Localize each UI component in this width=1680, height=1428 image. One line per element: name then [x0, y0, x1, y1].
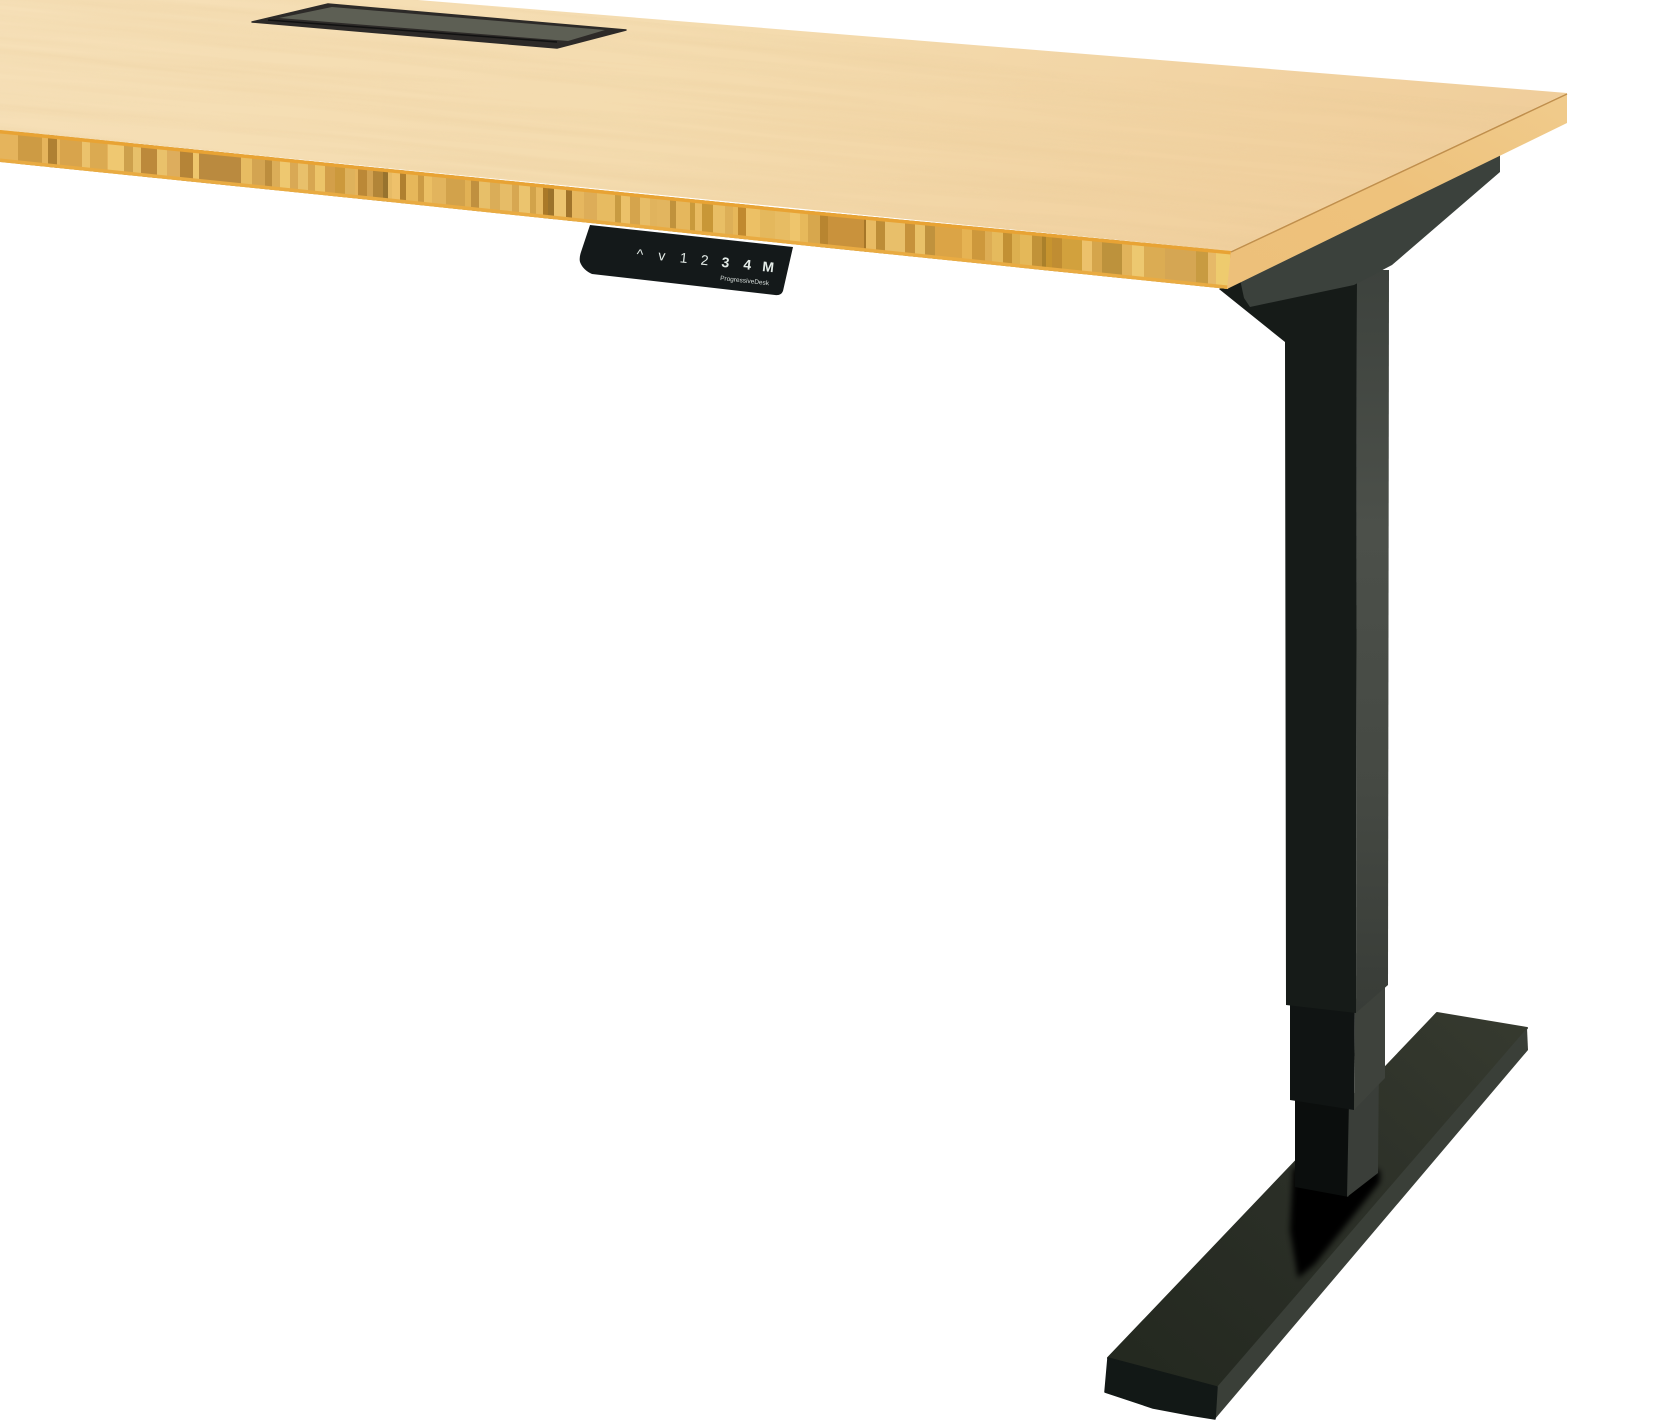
bracket: [1238, 145, 1500, 307]
foot: [1105, 1013, 1528, 1419]
shadow under leg: [1290, 1168, 1380, 1278]
cable grommet: [252, 4, 626, 48]
lower stage: [1295, 1060, 1379, 1197]
side edge highlight line: [1231, 94, 1567, 252]
grommet cover: [279, 7, 605, 41]
keypad keys: [636, 245, 775, 276]
grommet frame: [252, 4, 626, 48]
foot side face: [1215, 1028, 1528, 1419]
desktop: [0, 0, 1568, 289]
upper stage: [1219, 270, 1389, 1013]
leg column: [1219, 270, 1389, 1197]
front edge with bamboo strips: [0, 125, 1240, 295]
keypad keys: ^: [636, 246, 644, 262]
right side edge: [1227, 93, 1567, 289]
keypad keys: 2: [700, 252, 710, 268]
controller keypad: [580, 225, 793, 295]
grommet slot: [268, 20, 557, 42]
foot end cap: [1105, 1358, 1217, 1419]
keypad keys: 1: [679, 249, 689, 266]
foot top surface: [1108, 1013, 1527, 1387]
keypad keys: v: [658, 247, 666, 264]
keypad keys: 4: [743, 256, 752, 273]
keypad keys: 3: [721, 254, 730, 271]
keypad body: [580, 225, 793, 295]
keypad keys: M: [762, 258, 775, 275]
middle stage: [1290, 970, 1385, 1110]
keypad brand: ProgressiveDesk: [720, 275, 770, 287]
top surface: [0, 0, 1566, 251]
